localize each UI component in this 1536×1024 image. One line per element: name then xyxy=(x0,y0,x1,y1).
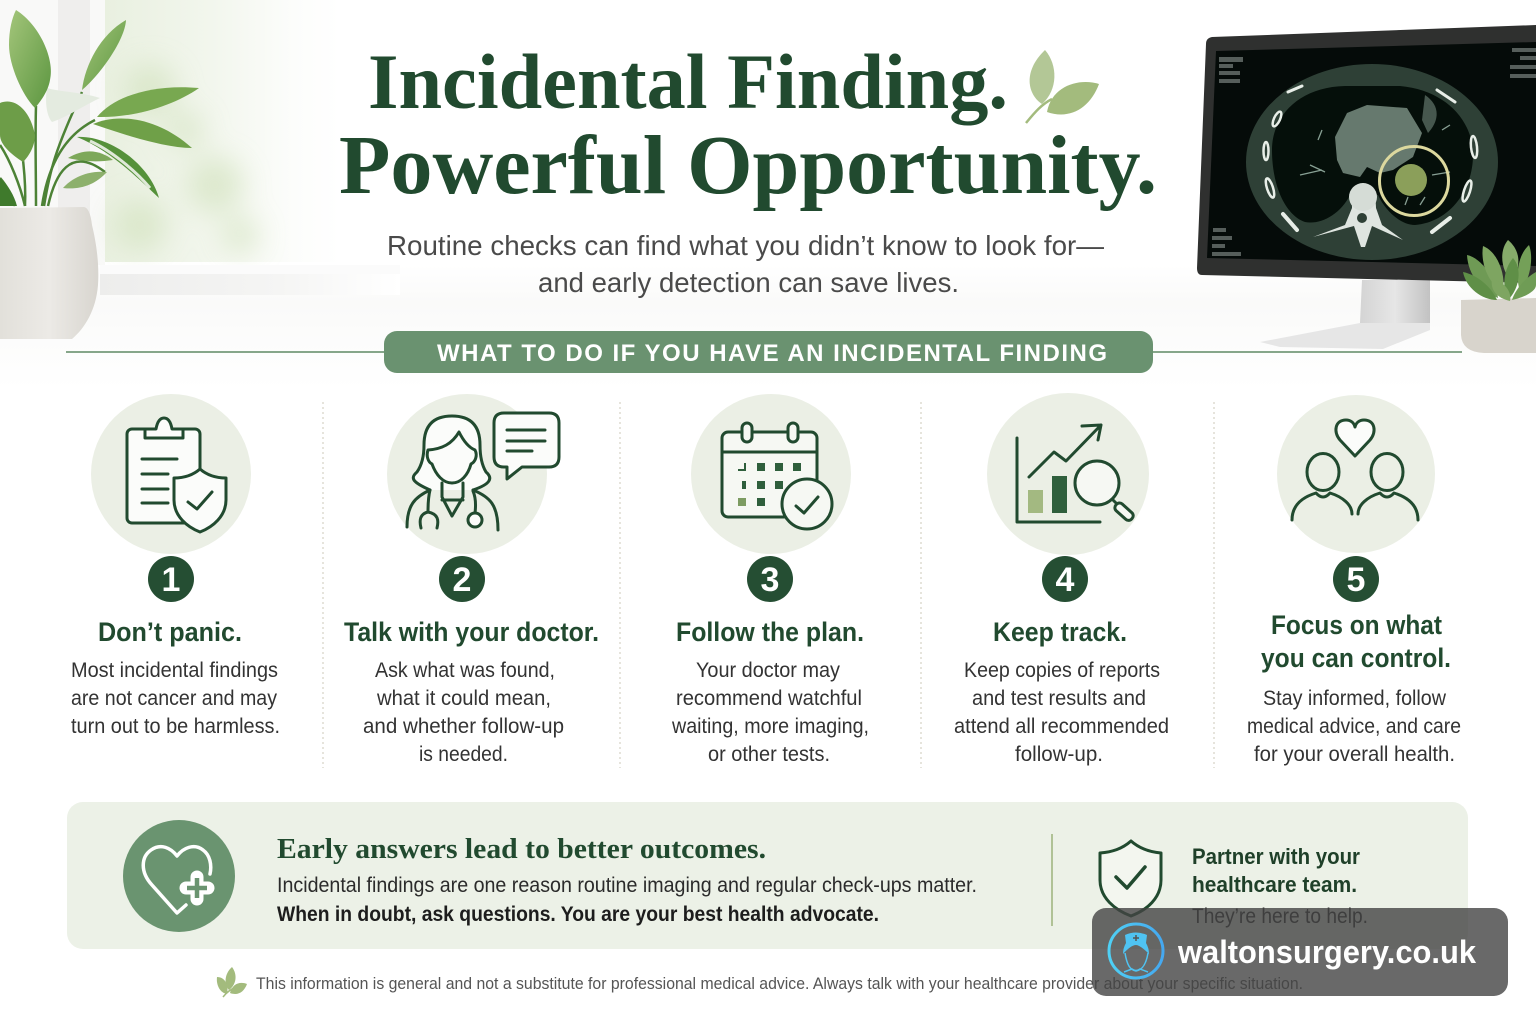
footer disclaimer: This information is general and not a substitute for professional medical advice. Always talk with your healthcare provider about your specific situation. xyxy=(256,975,1303,993)
subtitle: Routine checks can find what you didn’t know to look for— xyxy=(387,230,1104,261)
step number 1: 1 xyxy=(162,561,180,599)
text: step 3 body: Your doctor may xyxy=(696,659,840,682)
subtitle xyxy=(387,230,1104,298)
icon: heart with plus xyxy=(123,820,235,932)
text: step 2 body xyxy=(363,659,564,766)
text: partner with your healthcare team xyxy=(1192,844,1368,928)
text: step 2 body: Ask what was found, xyxy=(375,659,555,682)
step number 3: 3 xyxy=(761,561,779,599)
text: step 1 body: are not cancer and may xyxy=(71,687,277,710)
heading: Focus on what you can control: Focus on what xyxy=(1271,610,1442,640)
panel: step 1 xyxy=(71,394,280,738)
text: callout body: Incidental findings are one reason routine imaging and regular check-ups matter. xyxy=(277,874,977,897)
title xyxy=(339,38,1157,212)
text: callout body xyxy=(277,874,977,926)
text: step 1 body: turn out to be harmless. xyxy=(71,715,280,738)
step number 5 xyxy=(1333,556,1379,602)
CT scan body xyxy=(1246,64,1498,260)
text: step 4 body xyxy=(954,659,1169,766)
heading: Focus on what you can control xyxy=(1261,610,1451,673)
text: step 3 body: or other tests. xyxy=(708,743,830,766)
text: partner with your healthcare team: healthcare team. xyxy=(1192,872,1357,897)
heading: Don't panic: Don’t panic. xyxy=(98,617,242,647)
text: step 3 body xyxy=(671,659,869,766)
illustration: monitor with CT scan xyxy=(1197,25,1536,349)
watermark badge: waltonsurgery.co.uk xyxy=(1177,934,1476,970)
icon: chart with magnifier xyxy=(987,393,1149,555)
text: step 4 body: follow-up. xyxy=(1015,743,1103,766)
text: step 5 body: Stay informed, follow xyxy=(1263,687,1447,710)
title: Powerful Opportunity. xyxy=(339,119,1157,212)
icon: nurse logo xyxy=(1109,924,1163,978)
text: step 4 body: attend all recommended xyxy=(954,715,1169,738)
watermark badge xyxy=(1092,908,1508,996)
panel: step 2 xyxy=(344,394,599,766)
heading: Focus on what you can control: you can control. xyxy=(1261,643,1451,673)
nodule with highlight ring xyxy=(1380,146,1448,216)
heading: Talk with your doctor: Talk with your doctor. xyxy=(344,617,599,647)
illustration: potted plant xyxy=(0,10,199,339)
panel: step 3 xyxy=(671,394,869,766)
panel: step 4 xyxy=(954,393,1169,766)
text: step 5 body: medical advice, and care xyxy=(1247,715,1461,738)
illustration: succulent in pot xyxy=(1461,240,1536,353)
text: step 4 body: Keep copies of reports xyxy=(964,659,1160,682)
step number 1 xyxy=(148,556,194,602)
icon: clipboard with shield xyxy=(91,394,251,554)
heading: Follow the plan: Follow the plan. xyxy=(676,617,864,647)
plant pot xyxy=(0,207,98,339)
text: step 3 body: waiting, more imaging, xyxy=(671,715,869,738)
subtitle: and early detection can save lives. xyxy=(538,267,959,298)
text: partner with your healthcare team: Partner with your xyxy=(1192,844,1360,869)
text: step 5 body: for your overall health. xyxy=(1254,743,1455,766)
title: Incidental Finding. xyxy=(368,38,1008,125)
text: step 3 body: recommend watchful xyxy=(676,687,862,710)
step number 2: 2 xyxy=(453,561,471,599)
panel: step 5 xyxy=(1247,395,1461,766)
icon: doctor with speech bubble xyxy=(387,394,559,554)
footer disclaimer xyxy=(217,967,1303,997)
heading: Keep track: Keep track. xyxy=(993,617,1127,647)
text: step 5 body xyxy=(1247,687,1461,766)
step number 4 xyxy=(1042,556,1088,602)
text: step 2 body: what it could mean, xyxy=(376,687,551,710)
icon: title leaf xyxy=(1026,50,1099,123)
step number 5: 5 xyxy=(1347,561,1365,599)
step number 4: 4 xyxy=(1056,561,1075,599)
text: partner with your healthcare team: They’re here to help. xyxy=(1192,905,1368,928)
icon: two people and heart xyxy=(1277,395,1435,553)
step number 3 xyxy=(747,556,793,602)
text: step 1 body: Most incidental findings xyxy=(71,659,278,682)
banner: section heading: WHAT TO DO IF YOU HAVE AN INCIDENTAL FINDING xyxy=(437,340,1107,367)
text: step 1 body xyxy=(71,659,280,738)
icon: calendar with check xyxy=(691,394,851,554)
icon: footer leaf xyxy=(217,967,247,997)
text: step 4 body: and test results and xyxy=(972,687,1146,710)
banner: section heading xyxy=(66,331,1462,373)
text: step 2 body: and whether follow-up xyxy=(363,715,564,738)
icon: shield with check xyxy=(1100,841,1161,916)
panel: bottom callout xyxy=(67,802,1468,949)
heading: early answers: Early answers lead to better outcomes. xyxy=(277,833,766,865)
text: step 2 body: is needed. xyxy=(419,743,508,766)
step number 2 xyxy=(439,556,485,602)
monitor stand xyxy=(1260,280,1430,349)
text: callout body: When in doubt, ask questions. You are your best health advocate. xyxy=(277,903,879,926)
